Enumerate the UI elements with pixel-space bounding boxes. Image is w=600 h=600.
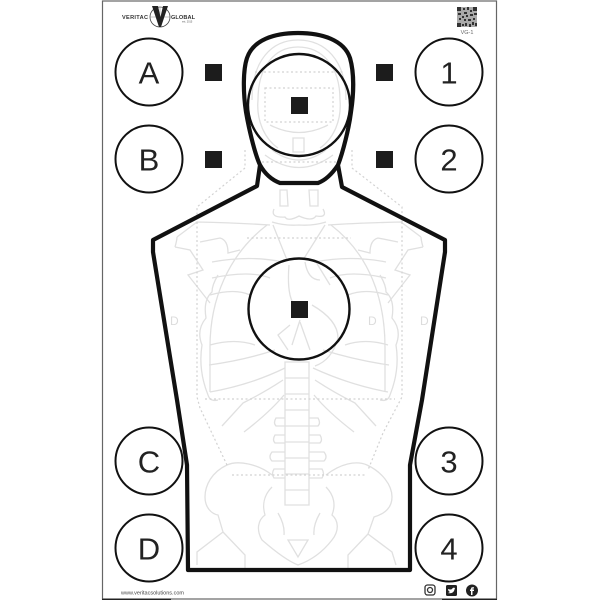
icon: twitter xyxy=(446,585,457,596)
sheet code: VG-1 xyxy=(461,30,473,36)
circle D: D xyxy=(138,532,160,566)
circle B xyxy=(116,126,182,192)
circle B: B xyxy=(139,142,159,178)
head aiming circle xyxy=(248,54,350,156)
skeleton anatomy underlay xyxy=(175,40,423,568)
logo: VERITAC xyxy=(122,15,148,21)
square target lower right xyxy=(376,151,393,168)
faint zone letters: D xyxy=(170,314,179,328)
neck vertebrae xyxy=(272,190,326,225)
circle A: A xyxy=(139,56,160,90)
circle 3: 3 xyxy=(440,444,458,480)
chest aiming circle xyxy=(248,258,350,360)
faint zone letters: D xyxy=(420,314,429,328)
circle D xyxy=(116,514,182,582)
square target upper left xyxy=(205,64,222,81)
rib cage and lungs xyxy=(200,225,398,432)
dotted reference lines xyxy=(197,72,402,475)
faint zone letters xyxy=(170,314,429,328)
circle 3 xyxy=(416,428,482,494)
circle 1: 1 xyxy=(440,56,458,90)
logo: est. 2015 xyxy=(182,20,193,24)
square target upper right xyxy=(376,64,393,81)
faint zone letters: D xyxy=(368,314,377,328)
logo xyxy=(122,6,196,27)
circle 2: 2 xyxy=(440,142,458,178)
website: www.veritacsolutions.com xyxy=(120,590,184,596)
head square xyxy=(291,97,308,114)
heart xyxy=(278,262,338,366)
silhouette outline xyxy=(153,33,445,570)
circle C xyxy=(116,428,182,494)
circle 1 xyxy=(416,38,482,106)
icon: facebook xyxy=(466,584,478,596)
spine xyxy=(270,362,326,505)
chest square xyxy=(291,301,308,318)
icon: instagram xyxy=(425,585,435,595)
logo: GLOBAL xyxy=(171,15,196,21)
square target lower left xyxy=(205,151,222,168)
circle 4 xyxy=(416,514,482,582)
circle C: C xyxy=(138,444,160,480)
head contours xyxy=(252,40,346,168)
circle A xyxy=(116,38,182,106)
QR code xyxy=(457,7,477,27)
circle 2 xyxy=(416,126,482,192)
pelvis xyxy=(197,463,396,568)
collar bones and scapulae xyxy=(175,222,423,303)
circle 4: 4 xyxy=(440,532,458,566)
